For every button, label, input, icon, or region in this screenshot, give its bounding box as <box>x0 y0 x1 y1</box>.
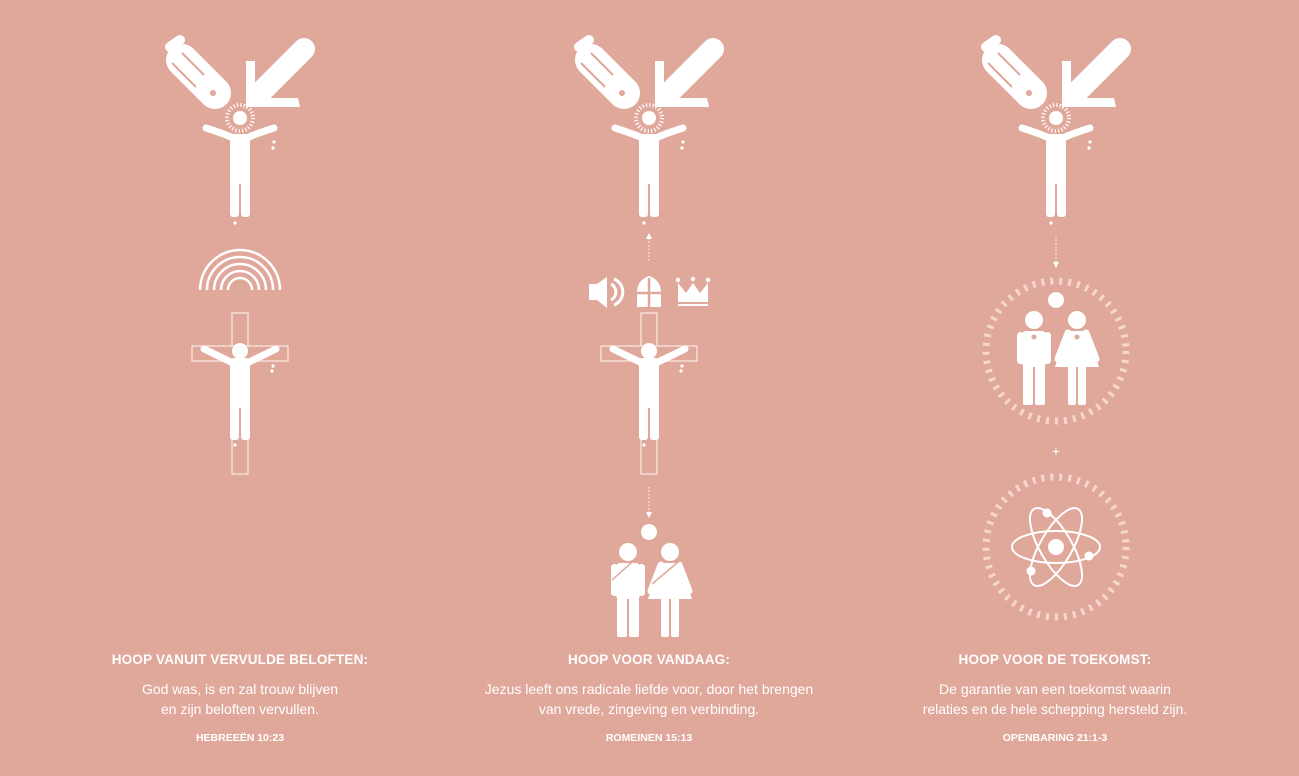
text block: column 3: De garantie van een toekomst waarin <box>939 681 1171 697</box>
text block: column 2: HOOP VOOR VANDAAG: <box>568 652 730 667</box>
text block: column 3: HOOP VOOR DE TOEKOMST: <box>959 652 1151 667</box>
icon: column 2 cross <box>601 313 697 474</box>
icon: couple col2 <box>611 524 692 637</box>
text block: column 1: HOOP VANUIT VERVULDE BELOFTEN: <box>112 652 368 667</box>
text block: column 1: en zijn beloften vervullen. <box>161 701 319 717</box>
icon: crown <box>676 277 710 306</box>
arrow: col2 dotted up <box>648 238 650 262</box>
text block: column 3: relaties en de hele schepping hersteld zijn. <box>923 701 1187 717</box>
icon: ring with couple <box>986 281 1126 421</box>
icon: column 3 risen figure <box>986 40 1120 225</box>
text block: column 2: Jezus leeft ons radicale liefde voor, door het brengen <box>485 681 813 697</box>
arrow: col2 dotted down <box>648 487 650 513</box>
icon: mitre <box>637 276 661 307</box>
text block: column 1: God was, is en zal trouw blijven <box>142 681 338 697</box>
text block: column 3 <box>923 652 1187 744</box>
icon: speaker <box>589 277 623 308</box>
arrow: col3 dotted down <box>1055 236 1057 262</box>
icon: column 1 cross <box>192 313 288 474</box>
text block: column 2: ROMEINEN 15:13 <box>606 732 692 744</box>
text block: column 3: OPENBARING 21:1-3 <box>1003 732 1107 744</box>
icon: column 1 risen figure <box>170 40 304 225</box>
text block: column 2: van vrede, zingeving en verbinding. <box>539 701 759 717</box>
icon: ring with atom <box>986 477 1126 617</box>
plus: + <box>1052 443 1060 459</box>
text block: column 1: HEBREEËN 10:23 <box>196 732 284 744</box>
text block: column 2 <box>485 652 813 744</box>
icon: rainbow <box>200 250 280 290</box>
text block: column 1 <box>112 652 368 744</box>
icon: column 2 risen figure <box>579 40 713 225</box>
